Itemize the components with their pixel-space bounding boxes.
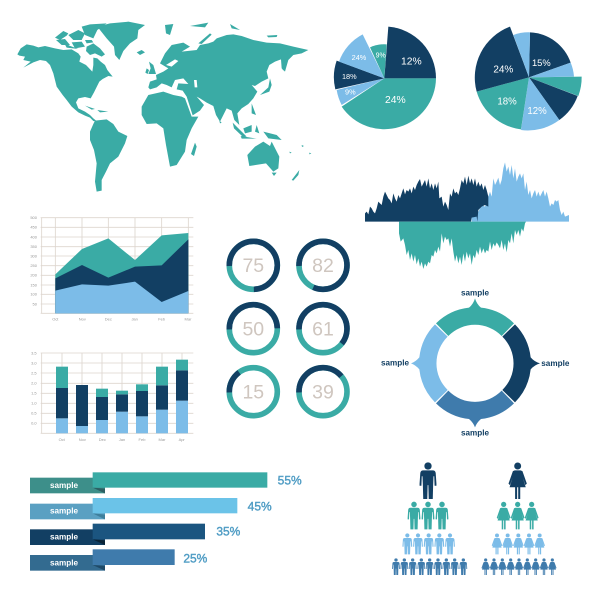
y axis labels: 200 [30, 273, 38, 278]
y axis labels: 2,5 [31, 370, 37, 375]
gauge 39: 39 [312, 382, 334, 404]
pie labels: 18% [342, 72, 357, 81]
x axis labels: Apr [179, 437, 185, 442]
y axis labels: 3,5 [31, 350, 37, 355]
waveform chart [365, 162, 569, 269]
gauge 61 [299, 305, 347, 353]
ribbon 35%: 35% [216, 525, 241, 539]
gauge 75: 75 [242, 255, 264, 277]
right segment [502, 324, 540, 402]
y axis labels: 50 [33, 301, 38, 306]
slice light 12% [521, 77, 559, 130]
x axis labels: Nov [79, 437, 86, 442]
slice light 9% [337, 78, 384, 105]
gauge 50 [229, 305, 277, 353]
pie labels: 15% [532, 58, 551, 68]
gauge 61: 61 [312, 318, 334, 340]
navy bars [56, 370, 188, 426]
slice navy 18% [334, 61, 384, 89]
x axis labels [52, 317, 192, 322]
slice light 24% [339, 34, 384, 78]
men pyramid [392, 462, 467, 575]
cycle diagram [381, 288, 570, 437]
cycle labels: sample [381, 358, 410, 367]
top woman [508, 463, 527, 499]
pie labels: 18% [497, 96, 517, 107]
donut gauges [229, 241, 347, 416]
ribbon 55% [30, 472, 302, 493]
horizontal ribbon bars [30, 472, 302, 571]
teal wave [399, 222, 526, 269]
x axis labels: Feb [139, 437, 146, 442]
y axis labels [30, 215, 38, 306]
slice navy 24% [475, 27, 529, 92]
light blue wave [472, 162, 569, 222]
blue men row [392, 558, 467, 575]
y axis labels: 500 [30, 215, 38, 220]
x axis labels [59, 437, 185, 442]
cycle labels: sample [541, 359, 570, 368]
light blue area [55, 282, 188, 313]
pie labels: 24% [493, 64, 513, 75]
y axis labels: 150 [30, 282, 38, 287]
slice navy [529, 77, 578, 120]
women pyramid [481, 463, 556, 575]
pie chart left [334, 27, 436, 129]
y axis labels [31, 350, 37, 426]
ribbon 25% [30, 549, 208, 571]
slice teal [529, 77, 582, 96]
cycle labels: sample [461, 288, 490, 297]
pie labels [342, 53, 422, 106]
bottom segment [436, 391, 514, 427]
cycle labels: sample [461, 428, 490, 437]
area chart [30, 215, 193, 322]
ribbon 25%: sample [50, 558, 79, 567]
y axis labels: 300 [30, 253, 38, 258]
gauge 50: 50 [242, 318, 264, 340]
slice light [513, 32, 530, 77]
pie labels: 24% [385, 95, 406, 106]
x axis labels: Jan [119, 437, 125, 442]
world map [17, 22, 311, 192]
left segment [411, 324, 448, 402]
ribbon 45%: 45% [248, 500, 272, 514]
y axis labels: 2,0 [31, 381, 37, 386]
slice teal 18% [477, 77, 529, 129]
y axis labels: 450 [30, 225, 38, 230]
ribbon 45% [30, 498, 272, 519]
y axis labels: 250 [30, 263, 38, 268]
gauge 82 [299, 241, 347, 289]
north america and arctic [17, 22, 145, 122]
x axis labels: Oct [59, 437, 66, 442]
ribbon 55%: 55% [278, 474, 302, 488]
gauge 82: 82 [312, 255, 334, 277]
x axis labels: Feb [158, 317, 166, 322]
slice teal 9% [370, 44, 387, 78]
x axis labels: Dec [105, 317, 112, 322]
gauge 75 [229, 241, 277, 289]
light blue bars [56, 401, 188, 433]
ribbon 35% [30, 524, 241, 545]
x axis labels: Oct [52, 317, 59, 322]
y axis labels: 400 [30, 234, 38, 239]
ribbon 55%: sample [50, 481, 79, 490]
eurasia [148, 34, 308, 125]
pie chart right [475, 27, 582, 130]
x axis labels: Jan [131, 317, 138, 322]
gauge 15 [229, 368, 277, 416]
africa and madagascar [142, 92, 198, 167]
x axis labels: Dec [99, 437, 106, 442]
navy area [55, 239, 188, 313]
slice teal 24% [342, 78, 436, 129]
top segment [436, 298, 514, 336]
pie labels: 24% [352, 53, 367, 62]
y axis labels: 0,5 [31, 411, 37, 416]
x axis labels: Nov [79, 317, 86, 322]
blue women row [481, 558, 556, 575]
y axis labels: 1,5 [31, 391, 37, 396]
y axis labels: 100 [30, 292, 38, 297]
pie labels: 9% [376, 53, 386, 60]
teal women row [497, 502, 539, 529]
light blue women row [492, 533, 545, 554]
teal bars [56, 360, 188, 397]
slice light [529, 63, 574, 77]
slice navy 12% [384, 27, 436, 78]
x axis labels: Mar [185, 317, 192, 322]
pie labels [493, 58, 551, 117]
south america [90, 119, 127, 192]
stacked bar chart [31, 350, 193, 442]
light blue men row [403, 533, 455, 554]
y axis labels: 0,0 [31, 421, 37, 426]
pie labels: 9% [345, 88, 356, 97]
gauge 15: 15 [242, 382, 264, 404]
x axis labels: Mar [159, 437, 166, 442]
australia [247, 142, 279, 172]
ribbon 25%: 25% [183, 552, 208, 566]
y axis labels: 350 [30, 244, 38, 249]
slice navy 15% [529, 32, 571, 77]
gauge 39 [299, 368, 347, 416]
ribbon 45%: sample [50, 507, 79, 516]
y axis labels: 3,0 [31, 360, 37, 365]
ribbon 35%: sample [50, 533, 79, 542]
asian and pacific islands [145, 23, 311, 181]
pie labels: 12% [401, 57, 422, 68]
teal men row [408, 502, 448, 529]
y axis labels: 1,0 [31, 401, 37, 406]
teal area [55, 233, 188, 313]
pie labels: 12% [527, 106, 547, 117]
cycle labels [381, 288, 570, 437]
top man [420, 462, 436, 499]
navy wave [365, 176, 488, 222]
